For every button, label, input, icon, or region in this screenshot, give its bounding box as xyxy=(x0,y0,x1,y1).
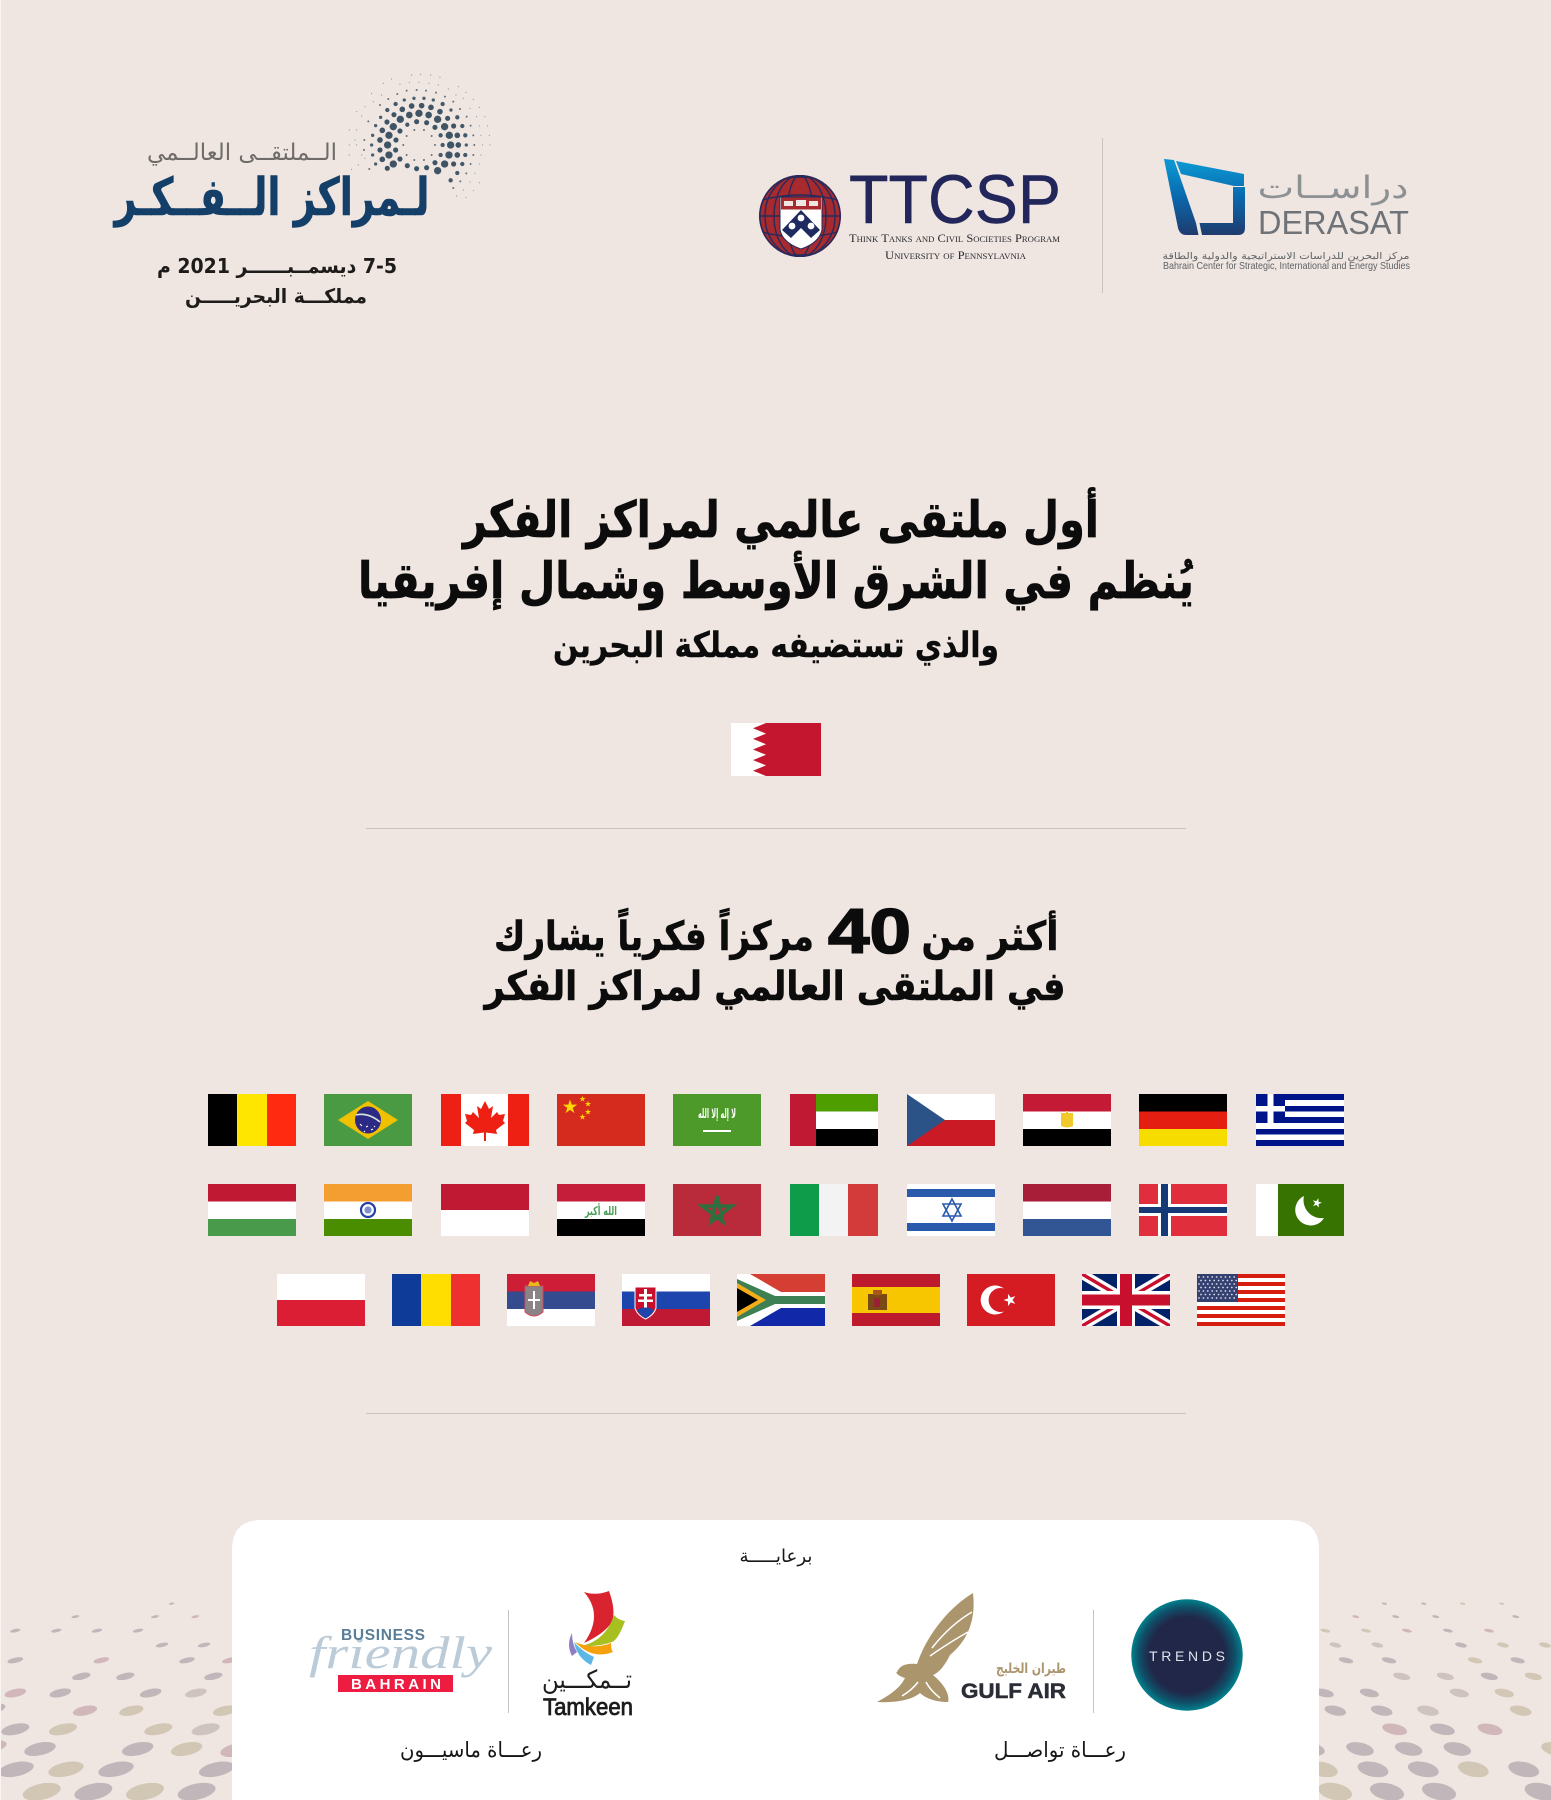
text: program name: Think Tanks and Civil Societies Program xyxy=(849,233,1060,245)
flag: Iraq xyxy=(557,1184,645,1236)
flag: Iraq: الله أكبر xyxy=(584,1203,617,1218)
text: line 2: في الملتقى العالمي لمراكز الفكر xyxy=(483,964,1066,1010)
flag: United States xyxy=(1197,1274,1285,1326)
title line 1: أول ملتقى عالمي لمراكز الفكر xyxy=(461,487,1099,550)
icon: Tamkeen sail xyxy=(569,1591,625,1665)
flag: Saudi Arabia xyxy=(673,1094,761,1146)
text: centre name Arabic: مركز البحرين للدراسات الاستراتيجية والدولية والطاقة xyxy=(1162,251,1410,262)
text: Derasat Arabic: دراســات xyxy=(1258,170,1408,206)
flag: Israel xyxy=(907,1184,995,1236)
text: Tamkeen Latin: Tamkeen xyxy=(543,1694,633,1721)
divider xyxy=(366,828,1186,829)
flag: UAE xyxy=(790,1094,878,1146)
heading: 40 think tanks xyxy=(483,897,1066,1010)
flag: Spain xyxy=(852,1274,940,1326)
flag: Poland xyxy=(277,1274,365,1326)
icon: Penn globe xyxy=(759,175,841,257)
page edge strip xyxy=(0,0,1,1800)
text: Gulf Air Arabic: طيران الخليج xyxy=(996,1661,1066,1677)
divider between header logos xyxy=(1102,138,1103,293)
text: location: مملكـــة البحريـــــن xyxy=(185,284,367,308)
flag: United Kingdom xyxy=(1082,1274,1170,1326)
text: communication sponsors: رعـــاة تواصـــل xyxy=(994,1738,1126,1762)
text: Tamkeen Arabic: تــمكـــين xyxy=(542,1665,632,1694)
flag: Egypt xyxy=(1023,1094,1111,1146)
flag: Netherlands xyxy=(1023,1184,1111,1236)
flag: Canada xyxy=(441,1094,529,1146)
flag: Hungary xyxy=(208,1184,296,1236)
decorative dot field, bottom right xyxy=(1296,1602,1551,1800)
logo: TTCSP xyxy=(759,174,1060,259)
decorative dot field, bottom left xyxy=(0,1602,253,1800)
text: BAHRAIN: BAHRAIN xyxy=(351,1676,441,1693)
text: think tanks line: لـمراكز الــفــكـر xyxy=(112,168,429,228)
flag: Saudi Arabia: لا إله إلا الله xyxy=(698,1107,736,1122)
flag: Bahrain xyxy=(731,723,821,776)
logo: Derasat xyxy=(1162,159,1410,272)
logo: Trends xyxy=(1131,1599,1243,1711)
icon: Derasat frame xyxy=(1164,159,1245,235)
logo: global think tank forum xyxy=(112,74,490,308)
text: forum line: الــملتقــى العالــمي xyxy=(147,140,337,166)
flag: Serbia xyxy=(507,1274,595,1326)
text: TTCSP wordmark: TTCSP xyxy=(849,161,1061,238)
badge: BAHRAIN xyxy=(338,1675,453,1692)
flag: India xyxy=(324,1184,412,1236)
heading: main title xyxy=(358,487,1194,666)
panel: sponsors xyxy=(232,1520,1319,1800)
flag: Brazil xyxy=(324,1094,412,1146)
flag: Morocco xyxy=(673,1184,761,1236)
flag: Italy xyxy=(790,1184,878,1236)
text: date: 7-5 ديسمــبــــــر 2021 م xyxy=(157,254,397,278)
flag: Germany xyxy=(1139,1094,1227,1146)
logo: Gulf Air xyxy=(877,1593,1066,1703)
subtitle: والذي تستضيفه مملكة البحرين xyxy=(553,626,999,666)
title line 2: يُنظم في الشرق الأوسط وشمال إفريقيا xyxy=(358,550,1194,611)
flag: Slovakia xyxy=(622,1274,710,1326)
flag: Indonesia xyxy=(441,1184,529,1236)
divider between mass sponsors xyxy=(508,1610,509,1713)
icon: falcon xyxy=(877,1593,974,1702)
text: centre name English: Bahrain Center for Strategic, International and Energy Studies xyxy=(1163,260,1410,272)
text: friendly script: friendly xyxy=(309,1627,493,1678)
flag: China xyxy=(557,1094,645,1146)
flag: Czech Republic xyxy=(907,1094,995,1146)
text: TRENDS: TRENDS xyxy=(1149,1648,1225,1664)
text: mass media sponsors: رعـــاة ماسيـــون xyxy=(400,1738,542,1762)
flag: Greece xyxy=(1256,1094,1344,1146)
flag: Norway xyxy=(1139,1184,1227,1236)
divider between communication sponsors xyxy=(1093,1610,1094,1713)
text: more than: أكثر من xyxy=(922,910,1058,960)
divider xyxy=(366,1413,1186,1414)
icon: Penn shield xyxy=(780,197,822,249)
text: university: University of Pennsylavnia xyxy=(885,250,1026,262)
flag: South Africa xyxy=(737,1274,825,1326)
flags grid xyxy=(208,1094,1344,1326)
flag: Belgium xyxy=(208,1094,296,1146)
text: GULF AIR: GULF AIR xyxy=(961,1680,1066,1703)
flag: Pakistan xyxy=(1256,1184,1344,1236)
logo: Business Friendly Bahrain xyxy=(309,1627,493,1693)
text: under the patronage of: برعايـــــة xyxy=(740,1546,812,1567)
text: BUSINESS: BUSINESS xyxy=(341,1627,425,1644)
flag: Romania xyxy=(392,1274,480,1326)
icon: dot sphere xyxy=(349,74,490,197)
logo: Tamkeen xyxy=(542,1591,633,1721)
number: 40: 40 xyxy=(828,897,911,967)
text: DERASAT: DERASAT xyxy=(1258,204,1409,241)
text: think tanks participating: مركزاً فكرياً يشارك xyxy=(494,907,814,960)
flag: Turkey xyxy=(967,1274,1055,1326)
